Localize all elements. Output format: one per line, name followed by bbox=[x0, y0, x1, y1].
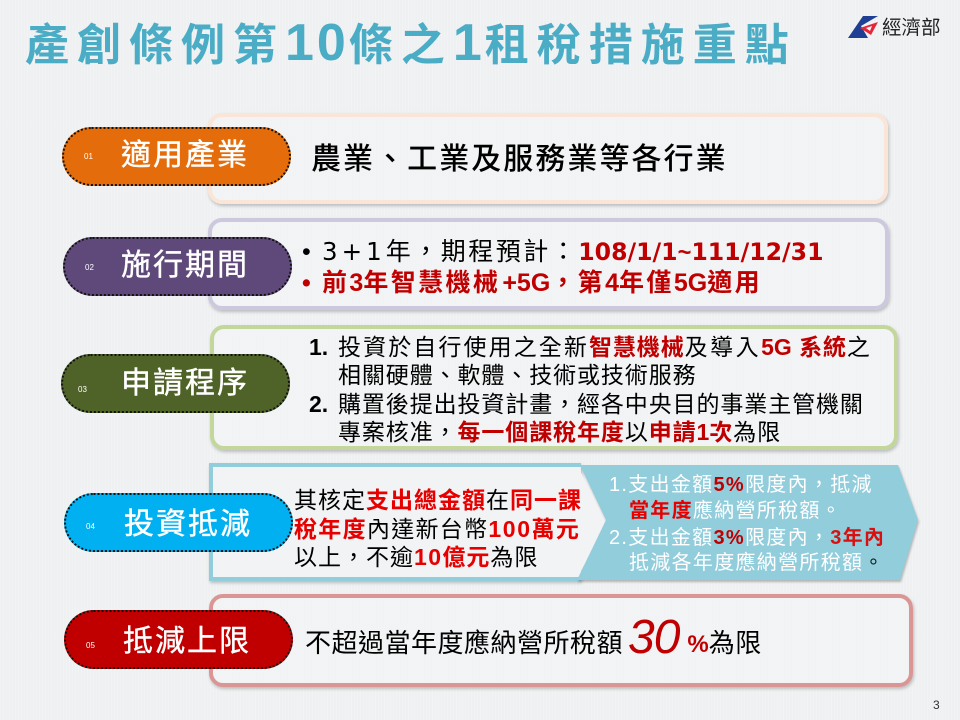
text: credit rates: 當年度應納營所稅額。 bbox=[629, 500, 842, 522]
text: investment credit conditions: 稅年度內達新台幣100萬元 bbox=[294, 516, 580, 542]
text: investment credit conditions: 以上，不逾10億元為限 bbox=[294, 544, 538, 570]
label pill 05 bbox=[64, 610, 293, 669]
panel: credit ceiling bbox=[209, 594, 913, 687]
label pill 03: 03 bbox=[78, 385, 87, 394]
label pill 03 bbox=[61, 354, 290, 413]
text: credit ceiling: 不超過當年度應納營所稅額30 %為限 bbox=[305, 611, 762, 664]
label pill 05: 05 bbox=[86, 641, 95, 650]
label pill 01: 適用產業 bbox=[121, 139, 249, 172]
label pill 02: 02 bbox=[85, 263, 94, 272]
panel: investment credit bbox=[209, 463, 581, 581]
page number: 3 bbox=[933, 698, 940, 712]
text: implementation period: 前3年智慧機械+5G，第4年僅5G適用 bbox=[322, 269, 762, 297]
label pill 02: 施行期間 bbox=[121, 249, 249, 282]
label pill 04: 投資抵減 bbox=[124, 508, 252, 541]
text: application procedure: 相關硬體、軟體、技術或技術服務 bbox=[338, 362, 696, 388]
icon: ministry logo: 經濟部 bbox=[882, 17, 941, 39]
text: implementation period: • bbox=[302, 269, 311, 297]
label pill 05: 抵減上限 bbox=[123, 625, 251, 658]
text: application procedure: 2. bbox=[309, 391, 328, 417]
label pill 02 bbox=[63, 237, 292, 296]
panel: implementation period bbox=[208, 218, 889, 310]
text: application procedure: 投資於自行使用之全新智慧機械及導入5G 系統之 bbox=[338, 334, 871, 360]
text: application procedure bbox=[309, 334, 871, 445]
text: investment credit conditions bbox=[294, 487, 582, 570]
text: credit rates: 1.支出金額5%限度內，抵減 bbox=[609, 474, 873, 496]
text: credit rates: 2.支出金額3%限度內，3年內 bbox=[609, 527, 885, 549]
arrow: credit rates bbox=[578, 465, 920, 583]
text: applicable industries: 農業、工業及服務業等各行業 bbox=[311, 143, 728, 176]
label pill 01 bbox=[62, 127, 291, 186]
text: application procedure: 1. bbox=[309, 334, 328, 360]
text: credit rates bbox=[609, 474, 885, 574]
text: implementation period: • bbox=[302, 238, 311, 266]
text: application procedure: 購置後提出投資計畫，經各中央目的事業主管機關 bbox=[338, 391, 864, 417]
title: 產創條例第10條之1租稅措施重點 bbox=[25, 14, 797, 72]
text: credit rates: 抵減各年度應納營所稅額。 bbox=[629, 552, 885, 574]
text: implementation period: 3+1年，期程預計：108/1/1~111/12/31 bbox=[322, 237, 824, 266]
panel: application procedure bbox=[210, 325, 898, 450]
label pill 03: 申請程序 bbox=[121, 367, 249, 400]
label pill 04: 04 bbox=[86, 522, 95, 531]
text: application procedure: 專案核准，每一個課稅年度以申請1次為限 bbox=[338, 419, 781, 445]
label pill 04 bbox=[64, 493, 293, 552]
icon: ministry logo bbox=[848, 16, 941, 39]
panel: applicable industries bbox=[208, 113, 888, 204]
text: investment credit conditions: 其核定支出總金額在同一課 bbox=[294, 487, 582, 513]
label pill 01: 01 bbox=[84, 152, 93, 161]
text: implementation period bbox=[302, 237, 824, 297]
